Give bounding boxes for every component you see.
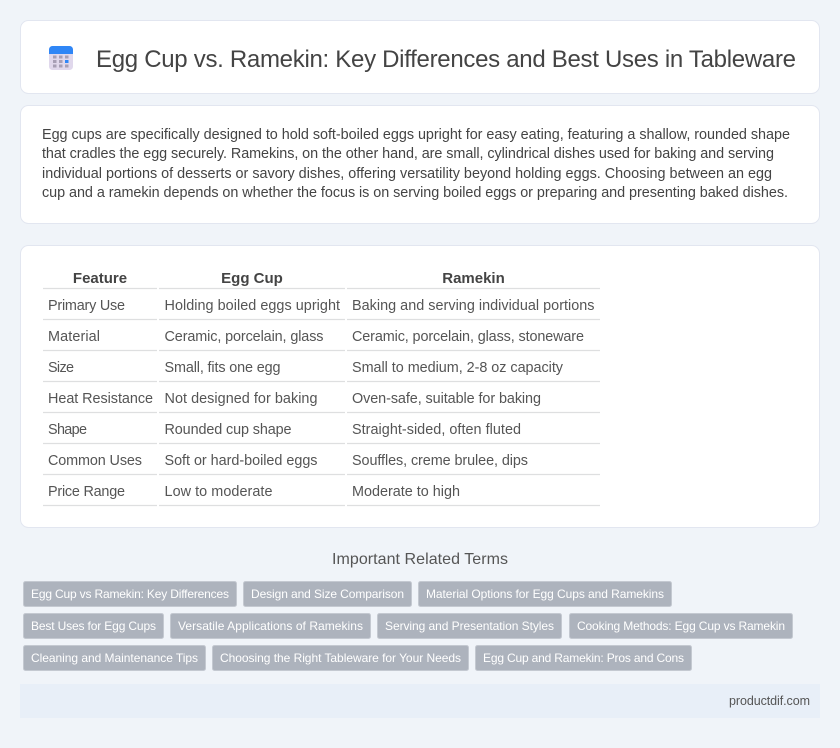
table row: material: Ceramic, porcelain, glass [164, 329, 324, 345]
table row: size [48, 360, 564, 376]
intro text [42, 127, 790, 201]
table row: material [48, 329, 584, 345]
table row: heat resistance [48, 391, 541, 407]
intro text: that cradles the egg securely. Ramekins, on the other hand, are small, cylindrical dishes used for baking and serving [42, 146, 774, 162]
tag [212, 646, 468, 670]
table row: size: Size [48, 360, 74, 376]
header panel [20, 20, 820, 94]
tag [170, 614, 370, 638]
tag [570, 614, 792, 638]
table row: primary use: Holding boiled eggs upright [164, 298, 340, 314]
table row: shape: Rounded cup shape [164, 422, 292, 438]
table row: shape: Shape [48, 422, 87, 438]
tag: Choosing the Right Tableware for Your Needs [220, 651, 461, 665]
table row: material: Ceramic, porcelain, glass, stoneware [352, 329, 584, 345]
panel: intro paragraph [20, 106, 820, 224]
table row: size: Small, fits one egg [164, 360, 280, 376]
table row: common uses [48, 453, 528, 469]
title: Egg Cup vs. Ramekin: Key Differences and Best Uses in Tableware [96, 46, 796, 73]
tag: Serving and Presentation Styles [385, 619, 554, 633]
table row: primary use: Baking and serving individual portions [352, 298, 594, 314]
intro text: Egg cups are specifically designed to hold soft-boiled eggs upright for easy eating, featuring a shallow, rounded shape [42, 127, 790, 143]
table row: price range: Price Range [48, 484, 125, 500]
related term tags [24, 582, 792, 670]
tag: Cooking Methods: Egg Cup vs Ramekin [577, 619, 785, 633]
tag [378, 614, 562, 638]
tag [418, 582, 672, 606]
table row: heat resistance: Oven-safe, suitable for baking [352, 391, 541, 407]
tag [24, 582, 236, 606]
table header: Egg Cup [221, 270, 283, 287]
tag: Material Options for Egg Cups and Ramekins [426, 587, 664, 601]
table row: shape [48, 422, 521, 438]
table row: heat resistance: Not designed for baking [164, 391, 318, 407]
footer bar [20, 684, 820, 718]
tag [476, 646, 692, 670]
table row: size: Small to medium, 2-8 oz capacity [352, 360, 564, 376]
table row: common uses: Common Uses [48, 453, 142, 469]
table row: shape: Straight-sided, often fluted [352, 422, 521, 438]
tag [24, 646, 206, 670]
table header: Feature [73, 270, 127, 287]
tag: Egg Cup and Ramekin: Pros and Cons [483, 651, 684, 665]
tag: Cleaning and Maintenance Tips [31, 651, 198, 665]
table row: material: Material [48, 329, 100, 345]
tag: Versatile Applications of Ramekins [178, 619, 363, 633]
icon: calendar [49, 46, 73, 70]
table row: price range [48, 484, 460, 500]
table row: price range: Moderate to high [352, 484, 460, 500]
table row: common uses: Souffles, creme brulee, dips [352, 453, 528, 469]
table row: primary use [48, 298, 594, 314]
intro text: individual portions of desserts or savory dishes, offering versatility beyond holding eggs. Choosing between an egg [42, 166, 772, 182]
footer source text: productdif.com [729, 694, 810, 708]
table row: primary use: Primary Use [48, 298, 125, 314]
tag: Egg Cup vs Ramekin: Key Differences [31, 587, 229, 601]
table header: Ramekin [442, 270, 505, 287]
heading: important related terms: Important Related Terms [332, 551, 508, 568]
intro text: cup and a ramekin depends on whether the focus is on serving boiled eggs or preparing and presenting baked dishes. [42, 185, 788, 201]
tag: Design and Size Comparison [251, 587, 404, 601]
table row: price range: Low to moderate [164, 484, 272, 500]
tag [244, 582, 412, 606]
panel: comparison table [20, 246, 820, 528]
tag [24, 614, 164, 638]
table row: heat resistance: Heat Resistance [48, 391, 153, 407]
table row: common uses: Soft or hard-boiled eggs [164, 453, 318, 469]
table header [73, 270, 505, 287]
tag: Best Uses for Egg Cups [31, 619, 156, 633]
